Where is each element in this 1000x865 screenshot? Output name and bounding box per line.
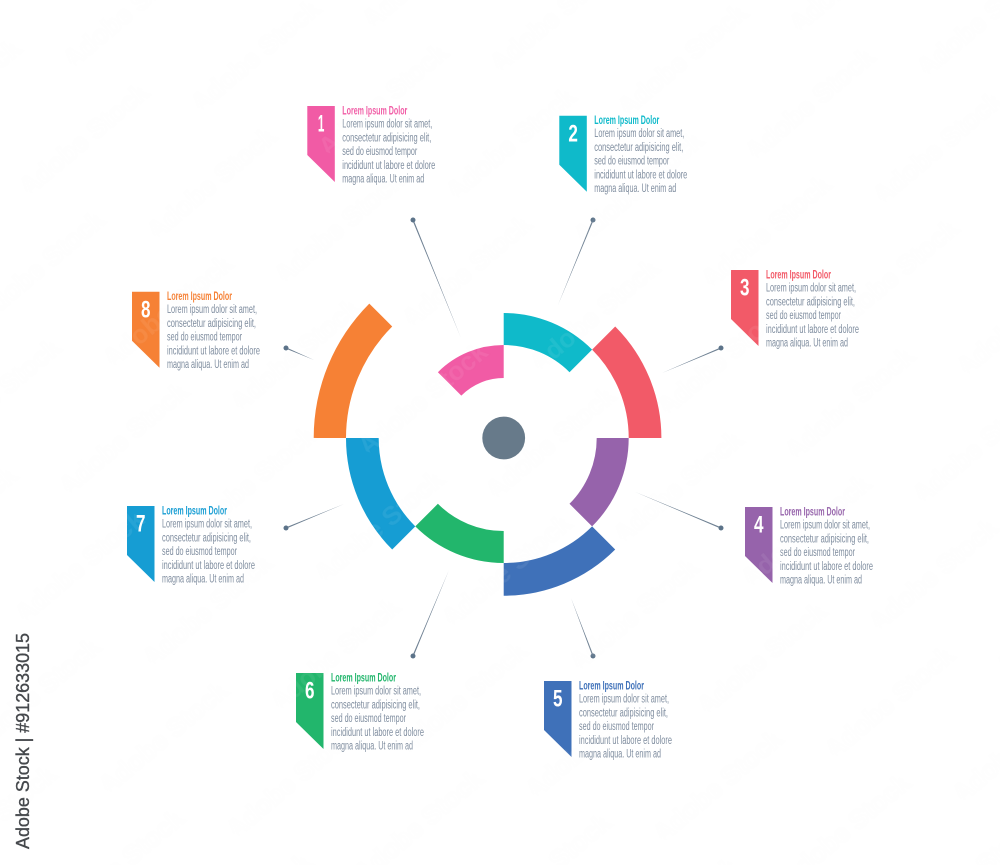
- item 7: [127, 506, 255, 586]
- leader line 3: [662, 346, 724, 373]
- centre circle: [482, 417, 525, 459]
- item 1: [307, 106, 435, 186]
- text 4: [780, 520, 873, 586]
- item 3: [731, 270, 859, 350]
- leader line 2: [558, 218, 596, 305]
- segment 5: blue: [504, 526, 615, 596]
- segment 7: sky blue: [346, 438, 415, 550]
- number 2: 2: [568, 120, 578, 147]
- leader line 8: [284, 346, 314, 360]
- segment 8: orange: [314, 304, 392, 438]
- leader line 4: [633, 491, 724, 530]
- leader line 1: [410, 218, 461, 338]
- number 3: 3: [740, 275, 750, 302]
- leader line 6: [410, 570, 449, 658]
- leader line 5: [571, 598, 596, 658]
- segment 6: green: [415, 504, 504, 563]
- heading 1: Lorem Ipsum Dolor: [342, 106, 408, 118]
- tag 7: [127, 506, 154, 582]
- heading 7: Lorem Ipsum Dolor: [162, 506, 227, 518]
- segment 2: teal: [504, 313, 592, 372]
- item 2: [559, 115, 687, 195]
- text 7: [162, 518, 255, 586]
- segment 3: red: [592, 326, 661, 438]
- text 6: [331, 686, 424, 752]
- tag 2: [559, 116, 587, 192]
- text 3: [766, 282, 859, 350]
- tag 3: [731, 270, 758, 346]
- segment 1: pink: [438, 345, 504, 396]
- tag 8: [132, 292, 160, 368]
- heading 8: Lorem Ipsum Dolor: [167, 291, 232, 303]
- number 7: 7: [136, 511, 146, 538]
- item 6: [296, 672, 424, 752]
- text 1: [342, 118, 435, 186]
- heading 2: Lorem Ipsum Dolor: [594, 115, 660, 127]
- number 8: 8: [141, 296, 151, 323]
- text 8: [167, 304, 260, 371]
- item 5: [544, 680, 672, 760]
- tag 6: [296, 673, 324, 749]
- leader line 7: [284, 504, 344, 530]
- number 5: 5: [553, 686, 563, 713]
- item 1: 1: [318, 111, 324, 138]
- tag 5: [544, 681, 572, 757]
- number 4: 4: [754, 512, 764, 539]
- tag 4: [745, 507, 772, 583]
- tag 1: [307, 106, 335, 182]
- stock image credit: Adobe Stock | #912633015: [13, 633, 33, 849]
- text 2: [594, 128, 687, 195]
- heading 3: Lorem Ipsum Dolor: [766, 270, 831, 282]
- ring chart: [314, 304, 661, 596]
- text 5: [579, 694, 672, 760]
- heading 6: Lorem Ipsum Dolor: [331, 672, 396, 684]
- heading 5: Lorem Ipsum Dolor: [579, 680, 644, 692]
- item 4: [745, 506, 873, 586]
- number 6: 6: [305, 678, 315, 705]
- item 8: [132, 291, 260, 371]
- segment 4: purple: [570, 438, 629, 526]
- heading 4: Lorem Ipsum Dolor: [780, 506, 845, 518]
